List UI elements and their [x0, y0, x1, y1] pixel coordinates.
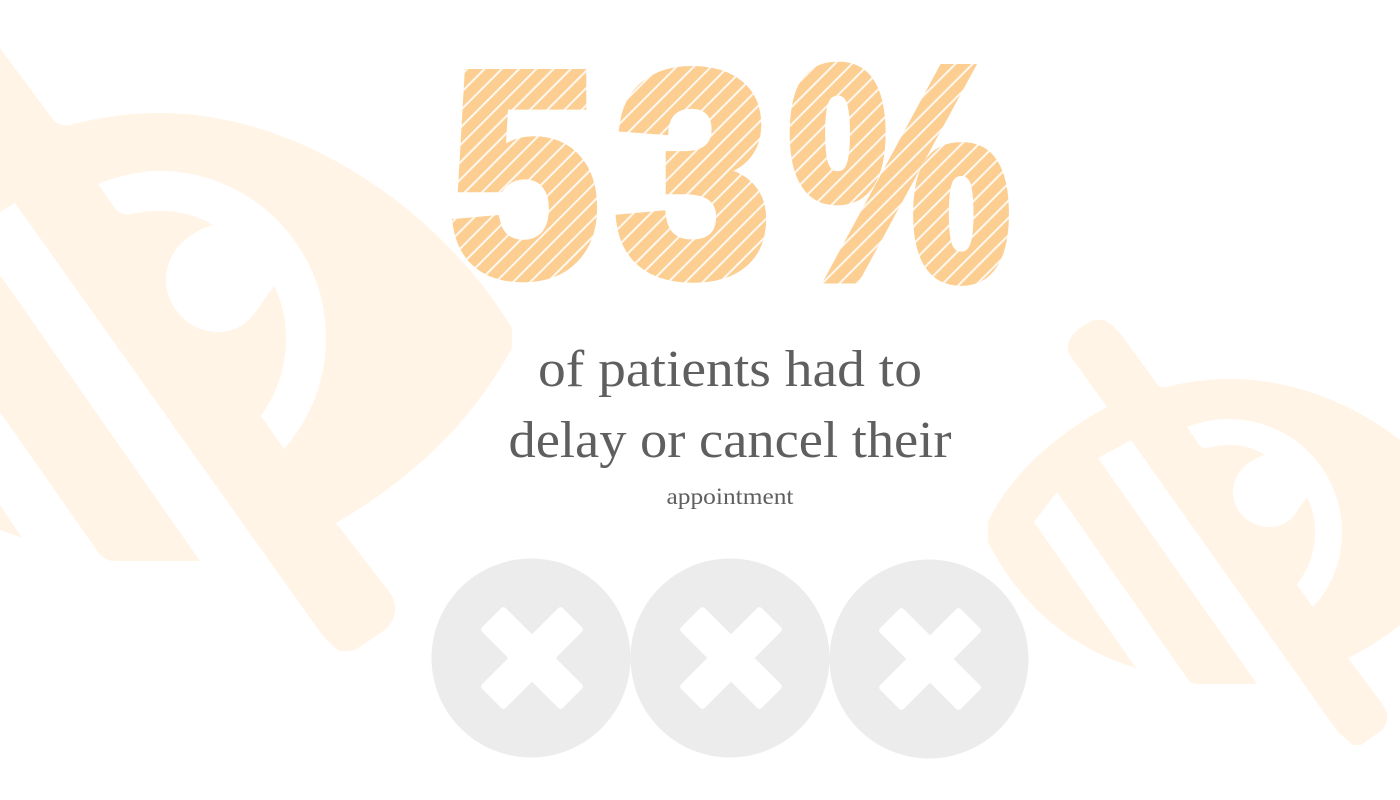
text: description [508, 341, 952, 509]
icon: cross circle 1 [432, 558, 630, 758]
big number: 53%: 3 [615, 12, 771, 336]
icon: crossed eye left [0, 48, 512, 651]
icon: crossed eye right [988, 320, 1400, 745]
text: description: of patients had to [538, 341, 922, 398]
big number: 53%: 5 [450, 12, 600, 336]
big number: 53%: % [788, 5, 1011, 343]
text: description: appointment [666, 484, 794, 509]
icon: cross circle 3 [830, 560, 1028, 758]
big number: 53% [450, 5, 1011, 343]
text: description: delay or cancel their [508, 412, 952, 469]
icon: cross circle 2 [630, 558, 830, 758]
